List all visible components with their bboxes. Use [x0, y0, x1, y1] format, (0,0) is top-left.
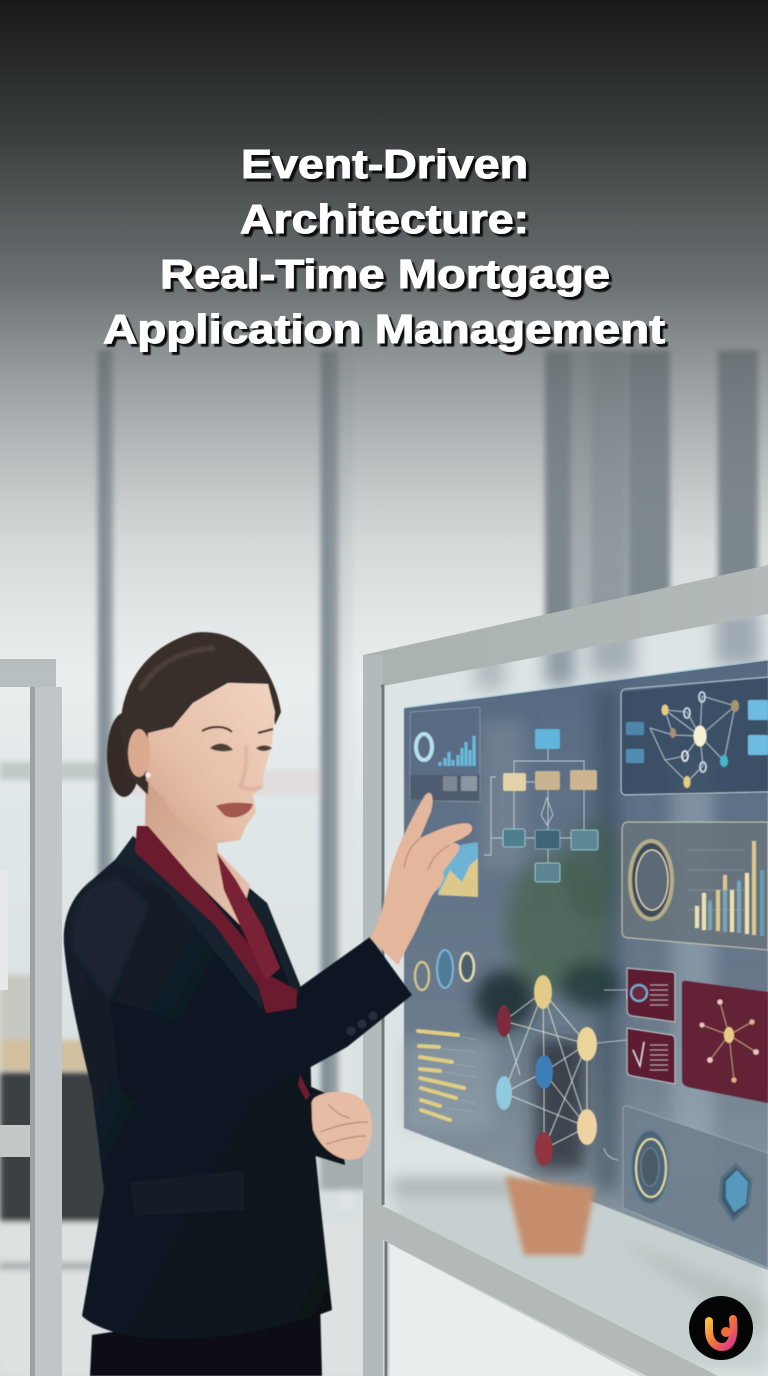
- trousers: [90, 1300, 322, 1376]
- reflections seen through the glass: [392, 610, 768, 1370]
- left glass partition: [0, 659, 62, 1376]
- dashboard tile: maroon cards: [627, 968, 768, 1103]
- blurred plant behind the glass: [475, 820, 620, 1170]
- dashboard tile: horizontal bars: [418, 1031, 476, 1120]
- dashboard tile: radar and ring: [623, 1106, 768, 1268]
- title: Event-Driven: [241, 141, 528, 187]
- brow and eyes: [202, 727, 273, 789]
- metal frame: inner shadow: [381, 686, 386, 1376]
- terracotta plant pot: [505, 1176, 595, 1255]
- jacket lapel right: [240, 882, 300, 1002]
- jacket body: [64, 836, 332, 1339]
- ear: [128, 729, 150, 777]
- hair bun: [107, 713, 141, 797]
- title: Real-Time Mortgage: [160, 251, 610, 297]
- metal frame: left post: [363, 655, 383, 1376]
- dashboard tile: analytics: [410, 707, 480, 802]
- jacket lapel: [115, 836, 262, 1010]
- title: [103, 141, 665, 352]
- jacket sleeve: [110, 937, 412, 1122]
- clasped hand: [310, 1092, 372, 1160]
- scarf tail: [298, 1075, 310, 1100]
- raised hand: [370, 793, 472, 965]
- icon: brand logo: [689, 1296, 753, 1360]
- hand crease: [404, 838, 450, 870]
- pocket: [130, 1170, 244, 1216]
- face: [146, 683, 275, 843]
- dashboard tile: node graph: [496, 975, 627, 1166]
- dashboard tile: area chart: [438, 842, 478, 897]
- glass pane: [383, 612, 768, 1376]
- hair: [121, 632, 281, 795]
- neck and chest: [145, 772, 250, 925]
- glass display board: [363, 565, 768, 1376]
- maroon scarf: [135, 826, 297, 1013]
- metal frame: top bar: [363, 565, 768, 686]
- dashboard tile: flowchart: [484, 729, 598, 882]
- title: Application Management: [103, 306, 665, 352]
- back hand and sleeve: [305, 1084, 345, 1165]
- transparent dashboard panel: [404, 660, 768, 1270]
- lower glass: [390, 1244, 640, 1376]
- metal frame: bottom bar: [363, 1195, 718, 1376]
- vertical reflections across the panel: [404, 690, 714, 1190]
- hair highlight: [140, 648, 215, 690]
- shoulder highlight: [72, 878, 150, 1000]
- woman presenter: [64, 632, 472, 1376]
- dashboard tile: small ring gauges: [415, 950, 474, 990]
- earring: [145, 772, 151, 778]
- sleeve buttons: [346, 1012, 378, 1036]
- top dark gradient overlay: [0, 0, 768, 680]
- lips: [216, 803, 253, 818]
- dashboard tile: network map: [621, 677, 768, 796]
- dashboard tile: gold gauge and bars: [622, 822, 768, 950]
- title: Architecture:: [240, 196, 529, 242]
- maroon scarf right: [217, 853, 280, 980]
- panel top glow line: [404, 660, 768, 708]
